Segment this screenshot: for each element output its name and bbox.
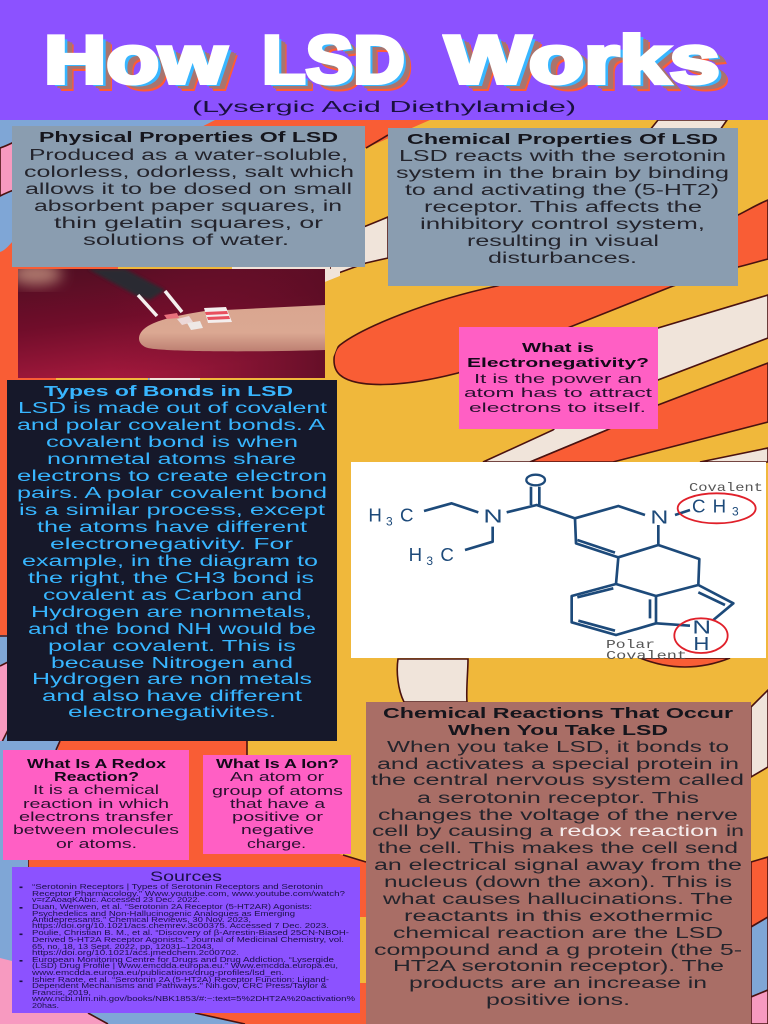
atom labels: N <box>692 616 711 637</box>
panel: sources <box>12 867 360 1013</box>
header band <box>0 0 768 120</box>
text: chemical properties body: receptor. This affects the <box>424 199 702 216</box>
diagram: LSD molecule with bond labels <box>351 462 766 663</box>
text: types of bonds body: LSD is made out of covalent <box>18 400 328 417</box>
panel: redox reaction: What Is A Redox <box>27 756 167 771</box>
molecule bonds <box>424 475 733 635</box>
text: chemical reactions body: what causes hallucinations. The <box>381 891 733 908</box>
atom labels: 3 <box>426 554 433 568</box>
callout: electronegativity: atom has to attract <box>464 385 653 400</box>
text: physical properties body: absorbent paper squares, in <box>34 198 342 215</box>
heading: sources: Sources <box>150 868 222 884</box>
text: chemical reactions body: redox reaction <box>559 823 718 840</box>
callout: electronegativity: Electronegativity? <box>467 355 649 370</box>
subtitle: (Lysergic Acid Diethylamide) <box>192 99 576 116</box>
text: types of bonds body: polar covalent. This is <box>48 638 296 655</box>
text: chemical reactions body <box>371 739 744 1009</box>
atom labels: 3 <box>386 515 393 529</box>
text: chemical reactions body: and activates a special protein in <box>377 756 739 773</box>
panel: ion: that have a <box>230 796 326 811</box>
panel: physical properties <box>12 126 365 267</box>
list: citations: www.emcdda.europa.eu/publications/drug-profiles/lsd_en. <box>31 968 284 977</box>
heading: chemical properties: Chemical Properties Of LSD <box>407 131 718 148</box>
text: types of bonds body: is a similar process, except <box>19 502 326 519</box>
text: chemical reactions body: nucleus (down the axon). This is <box>384 874 732 891</box>
label: polar covalent: Covalent <box>606 649 687 663</box>
atom labels: C <box>400 505 413 526</box>
text: chemical properties body <box>396 148 729 267</box>
text: chemical reactions body: When you take LSD, it bonds to <box>387 739 729 756</box>
list: citations: Francis, 2019, <box>32 988 91 997</box>
atom labels: C <box>440 544 454 565</box>
atom labels: 3 <box>732 505 739 519</box>
text: physical properties body: solutions of water. <box>83 232 289 249</box>
text: types of bonds body: the atoms have different <box>37 519 308 536</box>
panel: redox reaction: Reaction? <box>54 769 139 784</box>
list: citations: “Serotonin Receptors | Types of Serotonin Receptors and Serotonin <box>32 882 323 891</box>
list: citations: Antidepressants.” Chemical Reviews, 30 Nov. 2023, <box>32 915 251 924</box>
panel: redox reaction: or atoms. <box>56 836 137 851</box>
panel: chemical properties <box>388 128 738 286</box>
panel: ion: negative <box>241 822 314 837</box>
atom labels: H <box>409 544 422 565</box>
text: chemical reactions body: a serotonin receptor. This <box>417 790 699 807</box>
text: physical properties body <box>24 147 354 249</box>
panel: ion: What Is A Ion? <box>216 756 339 771</box>
callout: electronegativity <box>459 327 658 429</box>
text: types of bonds body: Hydrogen are non metals <box>32 671 312 688</box>
list: citations: https://doi.org/10.1021/acs.jmedchem.2c00702. <box>32 948 239 957</box>
text: physical properties body: colorless, odorless, salt which <box>24 164 354 181</box>
text: chemical reactions body: cell by causing a <box>372 823 554 840</box>
panel: ion: group of atoms <box>212 783 344 798</box>
atom labels: N <box>483 506 503 527</box>
text: physical properties body: Produced as a water-soluble, <box>29 147 348 164</box>
title: LSD <box>262 22 405 98</box>
title <box>44 22 728 98</box>
text: chemical properties body: to and activating the (5-HT2) <box>405 182 719 199</box>
title: Works <box>445 22 720 98</box>
text: chemical reactions body: changes the voltage of the nerve <box>378 807 738 824</box>
panel: ion: charge. <box>247 836 306 851</box>
panel: redox reaction: reaction in which <box>23 796 169 811</box>
text: chemical reactions body: the cell. This makes the cell send <box>378 840 738 857</box>
label: covalent: Covalent <box>689 481 763 495</box>
label: polar covalent <box>606 638 687 663</box>
heading: chemical reactions: Chemical Reactions That Occur <box>383 705 733 722</box>
text: chemical properties body: system in the brain by binding <box>396 165 729 182</box>
atom labels: H <box>713 495 726 516</box>
list: citations: Ishier Raote, et al. “Serotonin 2A (5-HT2A) Receptor Function: Ligand- <box>32 975 330 984</box>
photo: blotter paper on fingertip held by tweezers <box>10 263 325 378</box>
heading: chemical reactions: When You Take LSD <box>448 722 668 739</box>
text: types of bonds body: covalent bond is when <box>46 434 298 451</box>
text: chemical reactions body: reactants in this exothermic <box>404 908 713 925</box>
atom labels <box>368 495 739 654</box>
text: chemical reactions body: HT2A serotonin receptor). The <box>393 958 724 975</box>
list: citations: v=rZAoaqKAbic. Accessed 23 Dec. 2022. <box>32 895 200 904</box>
list: citations: Duan, Wenwen, et al. “Serotonin 2A Receptor (5-HT2AR) Agonists: <box>32 902 312 911</box>
callout: electronegativity: What is <box>522 340 594 355</box>
text: chemical properties body: LSD reacts with the serotonin <box>399 148 726 165</box>
title: How <box>44 22 226 98</box>
red circles <box>674 493 756 653</box>
text: types of bonds body: covalent as Carbon and <box>43 587 302 604</box>
list: citations: Receptor Pharmacology.” Www.youtube.com, www.youtube.com/watch? <box>32 889 345 898</box>
list: citations: (LSD) Drug Profile | Www.emcdda.europa.eu.” Www.emcdda.europa.eu, <box>32 961 338 970</box>
panel: chemical reactions <box>366 702 751 1024</box>
text: chemical reactions body: the central nervous system called <box>371 772 744 789</box>
heading: types of bonds: Types of Bonds in LSD <box>44 383 293 400</box>
text: chemical properties body: inhibitory control system, <box>420 216 705 233</box>
atom labels: H <box>693 633 709 654</box>
panel: redox reaction: It is a chemical <box>33 782 159 797</box>
callout: electronegativity: electrons to itself. <box>469 400 646 415</box>
text: types of bonds body: nonmetal atoms share <box>47 451 296 468</box>
text: physical properties body: thin gelatin squares, or <box>54 215 323 232</box>
panel: ion: positive or <box>232 809 324 824</box>
panel: redox reaction <box>3 750 189 860</box>
text: types of bonds body: pairs. A polar covalent bond <box>17 485 327 502</box>
list: citations: Poulie, Christian B. M., et al. “Discovery of β-Arrestin-Biased 25CN-NBOH- <box>32 928 350 937</box>
list: citations: European Monitoring Centre for Drugs and Drug Addiction. “Lysergide <box>32 955 334 964</box>
text: types of bonds body <box>17 400 328 721</box>
text: chemical reactions body: chemical reaction are the LSD <box>393 925 723 942</box>
list: citations: 20has. <box>32 1001 59 1010</box>
panel: types of bonds <box>7 380 337 741</box>
callout: electronegativity: It is the power an <box>474 371 642 386</box>
text: chemical reactions body: an electrical signal away from the <box>374 857 742 874</box>
list: citations: Psychedelics and Non-Hallucinogenic Analogues as Emerging <box>32 909 295 918</box>
atom labels: C <box>692 495 705 516</box>
text: types of bonds body: and polar covalent bonds. A <box>17 417 326 434</box>
list: citations: 65, no. 18, 13 Sept. 2022, pp. 12031–12043, <box>32 942 214 951</box>
atom labels: N <box>650 506 668 527</box>
text: types of bonds body: electronegativity. For <box>50 536 293 553</box>
text: types of bonds body: electrons to create electron <box>17 468 327 485</box>
text: chemical properties body: resulting in visual <box>467 233 659 250</box>
atom labels: H <box>368 505 382 526</box>
text: types of bonds body: electronegativites. <box>68 704 276 721</box>
text: types of bonds body: and the bond NH would be <box>28 621 316 638</box>
list: citations: Derived 5-HT2A Receptor Agonists.” Journal of Medicinal Chemistry, vol. <box>32 935 344 944</box>
text: chemical reactions body: in <box>726 823 744 840</box>
heading: physical properties: Physical Properties Of LSD <box>39 129 338 146</box>
text: types of bonds body: because Nitrogen and <box>51 655 293 672</box>
text: physical properties body: allows it to be dosed on small <box>25 181 352 198</box>
text: chemical reactions body: positive ions. <box>486 992 630 1009</box>
list: citations: https://doi.org/10.1021/acs.chemrev.3c00375. Accessed 7 Dec. 2023. <box>32 921 329 930</box>
list: citations <box>20 882 356 1010</box>
list: citations: Dependent Mechanisms and Pathways.” Nih.gov, CRC Press/Taylor & <box>32 981 327 990</box>
heading: chemical reactions <box>383 705 733 739</box>
list: citations: www.ncbi.nlm.nih.gov/books/NBK1853/#:~:text=5%2DHT2A%20activation% <box>31 994 356 1003</box>
panel: ion: An atom or <box>230 769 325 784</box>
text: chemical reactions body: products are an increase in <box>409 975 707 992</box>
text: types of bonds body: and also have different <box>42 688 303 705</box>
label: polar covalent: Polar <box>606 638 655 652</box>
text: types of bonds body: Hydrogen are nonmetals, <box>31 604 312 621</box>
text: chemical reactions body: compound and a g protein (the 5- <box>374 942 742 959</box>
text: types of bonds body: the right, the CH3 bond is <box>28 570 314 587</box>
panel: redox reaction: between molecules <box>13 822 180 837</box>
panel: redox reaction: electrons transfer <box>19 809 174 824</box>
panel: ion <box>203 755 351 854</box>
text: types of bonds body: example, in the diagram to <box>22 553 318 570</box>
text: chemical properties body: disturbances. <box>488 250 637 267</box>
